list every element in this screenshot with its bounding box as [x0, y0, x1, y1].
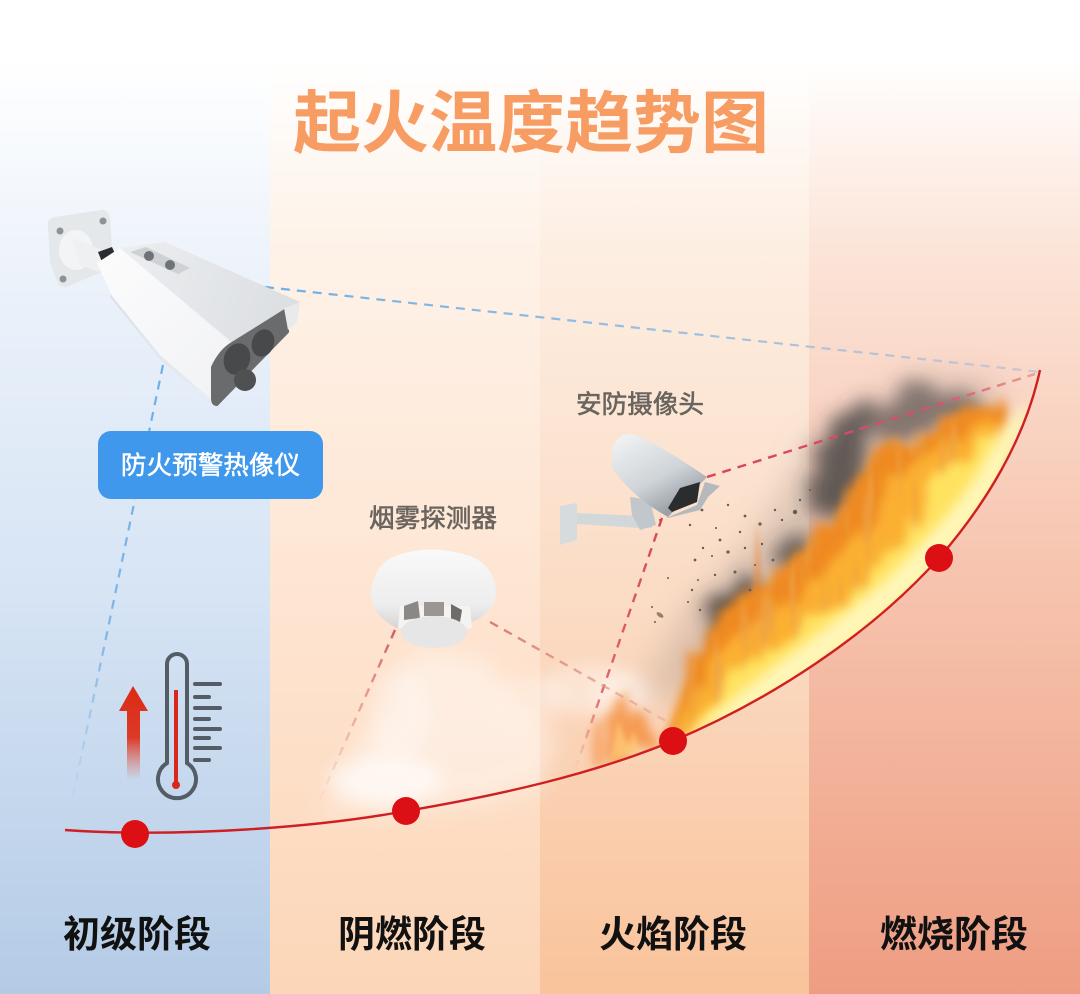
trend lines: blue dashed field of view: [70, 287, 1040, 810]
stage labels: [63, 914, 1028, 955]
smoke cloud: [325, 650, 657, 812]
trend lines: red dashed views: [315, 374, 1035, 810]
label: thermal camera: 防火预警热像仪: [121, 451, 300, 480]
label: burning stage: 燃烧阶段: [880, 914, 1028, 955]
label: smoke detector: 烟雾探测器: [369, 504, 497, 533]
faint rising flame streak: [752, 520, 764, 600]
grey haze: [640, 380, 1000, 700]
curve markers: [121, 544, 953, 848]
label: smoldering stage: 阴燃阶段: [338, 914, 486, 955]
icon: thermal bullet camera: [48, 210, 300, 405]
label: security camera: 安防摄像头: [576, 390, 704, 419]
title: 起火温度趋势图: [293, 86, 769, 162]
icon: rising arrow: [119, 686, 148, 780]
temperature curve: [65, 370, 1040, 833]
icon: thermometer: [158, 654, 220, 798]
flame streaks: [689, 423, 958, 706]
label: flame stage: 火焰阶段: [599, 914, 747, 955]
label: thermal camera: [98, 431, 323, 499]
pale core along the curve: [680, 400, 1030, 745]
yellow flame: [685, 430, 1012, 742]
small flame: [595, 690, 655, 765]
debris particles: [651, 489, 811, 623]
amber flame: [675, 415, 1010, 742]
icon: security camera: [560, 434, 720, 545]
fire along the curve: [640, 380, 1030, 745]
orange flame: [668, 400, 1010, 740]
label: initial stage: 初级阶段: [63, 914, 211, 955]
dark smoke: [700, 384, 984, 656]
icon: smoke detector: [371, 550, 496, 648]
